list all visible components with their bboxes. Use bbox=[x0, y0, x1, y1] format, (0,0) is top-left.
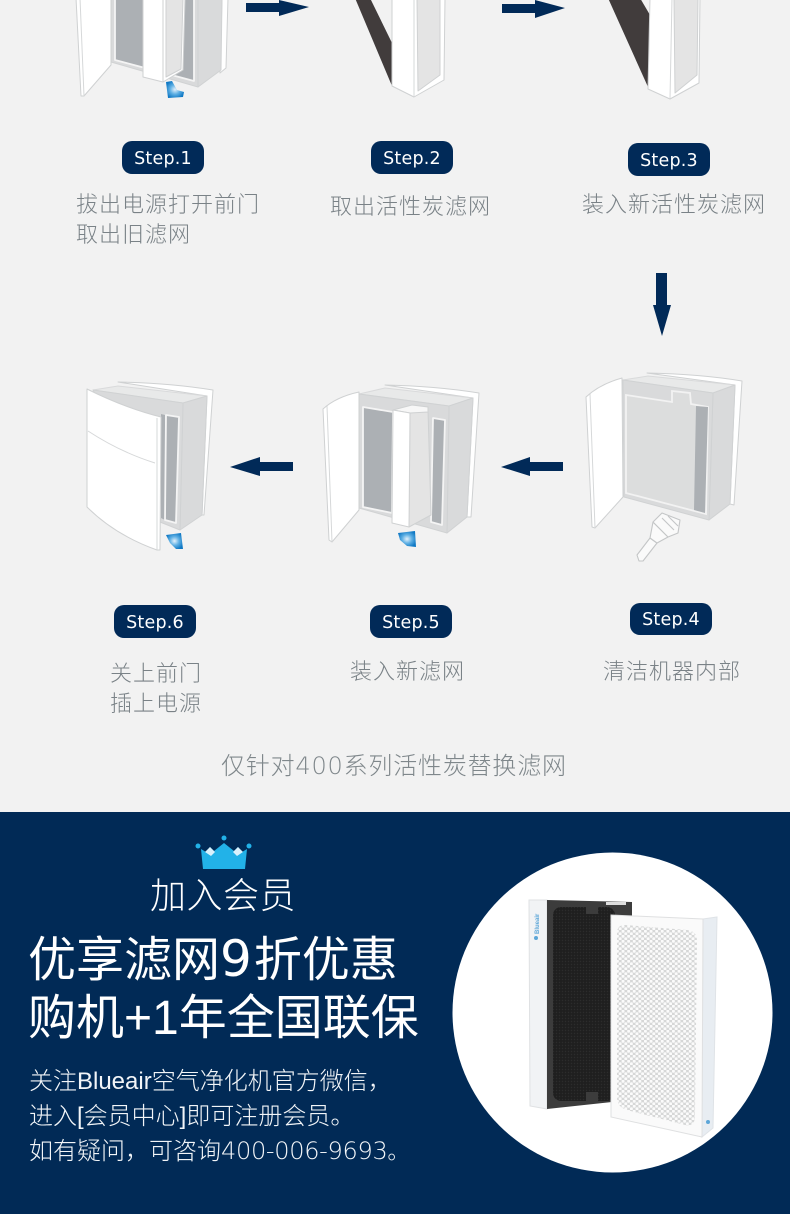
illustration: step 4 clean interior bbox=[586, 373, 742, 561]
badge: Step.1: Step.1 bbox=[134, 149, 192, 169]
text: how to register bbox=[29, 1068, 409, 1165]
badge: Step.6: Step.6 bbox=[126, 613, 184, 633]
text: step 2 description: 取出活性炭滤网 bbox=[330, 194, 491, 219]
arrow: step 2 to 3 bbox=[502, 0, 565, 18]
panel: light instructions background bbox=[0, 0, 790, 812]
illustration: step 3 new filter bbox=[608, 0, 700, 99]
badge: Step.3: Step.3 bbox=[640, 151, 698, 171]
carbon filter bbox=[529, 900, 632, 1109]
illustration: step 6 closed door bbox=[87, 382, 213, 550]
illustration: step 1 open machine bbox=[76, 0, 228, 96]
arrow: step 3 to 4 bbox=[653, 273, 671, 336]
panel: step 2 bbox=[330, 0, 491, 219]
icon: blue arrow step 5 bbox=[398, 531, 416, 547]
arrow: step 4 to 5 bbox=[501, 457, 563, 476]
text: how to register: 关注Blueair空气净化机官方微信， bbox=[29, 1068, 392, 1095]
panel: step 1 bbox=[76, 0, 260, 247]
panel: step 4 bbox=[586, 373, 742, 684]
illustration: step 5 install filter bbox=[323, 385, 479, 542]
panel: step 6 bbox=[87, 382, 213, 716]
note: applies to 400 series: 仅针对400系列活性炭替换滤网 bbox=[221, 752, 567, 780]
badge: Step.2 bbox=[371, 141, 453, 174]
badge: Step.5: Step.5 bbox=[382, 613, 440, 633]
illustration: step 2 filter removed bbox=[355, 0, 445, 97]
headline: filter discount and warranty: 购机+1年全国联保 bbox=[28, 992, 419, 1045]
product: filter pair bbox=[529, 900, 717, 1137]
headline: filter discount and warranty: 优享滤网9折优惠 bbox=[28, 930, 398, 988]
carbon filter: Blueair bbox=[535, 913, 541, 934]
arrow: step 5 to 6 bbox=[230, 457, 293, 476]
badge: Step.3 bbox=[628, 143, 710, 176]
badge: Step.6 bbox=[114, 605, 196, 638]
icon: crown bbox=[196, 836, 252, 869]
arrow: step 1 to 2 bbox=[246, 0, 309, 16]
headline: filter discount and warranty bbox=[28, 930, 419, 1045]
icon: blue arrow step 1 bbox=[166, 81, 184, 98]
badge: Step.2: Step.2 bbox=[383, 149, 441, 169]
text: how to register: 如有疑问，可咨询400-006-9693。 bbox=[29, 1137, 409, 1165]
badge: Step.4 bbox=[630, 603, 712, 635]
text: how to register: 进入[会员中心]即可注册会员。 bbox=[29, 1103, 354, 1130]
panel: membership band bbox=[0, 812, 790, 1214]
band background bbox=[0, 812, 790, 1214]
text: step 6 description: 插上电源 bbox=[110, 691, 202, 716]
text: step 5 description: 装入新滤网 bbox=[350, 659, 465, 684]
text: step 6 description bbox=[110, 661, 202, 716]
badge: Step.5 bbox=[370, 605, 452, 638]
bottom white strip bbox=[0, 1214, 790, 1227]
circle: white product background bbox=[452, 852, 772, 1172]
panel: step 3 bbox=[582, 0, 766, 217]
text: step 6 description: 关上前门 bbox=[110, 661, 202, 686]
heading: join membership: 加入会员 bbox=[150, 875, 296, 916]
text: step 1 description: 拔出电源打开前门 bbox=[76, 192, 260, 217]
icon: blue arrow step 6 bbox=[166, 533, 183, 549]
panel: step 5 bbox=[323, 385, 479, 684]
icon: power plug bbox=[637, 513, 680, 561]
text: step 4 description: 清洁机器内部 bbox=[603, 659, 741, 684]
badge: Step.1 bbox=[122, 141, 204, 174]
text: step 3 description: 装入新活性炭滤网 bbox=[582, 192, 766, 217]
text: step 1 description bbox=[76, 192, 260, 247]
text: step 1 description: 取出旧滤网 bbox=[76, 222, 191, 247]
hepa filter bbox=[611, 915, 717, 1137]
badge: Step.4: Step.4 bbox=[642, 610, 700, 630]
